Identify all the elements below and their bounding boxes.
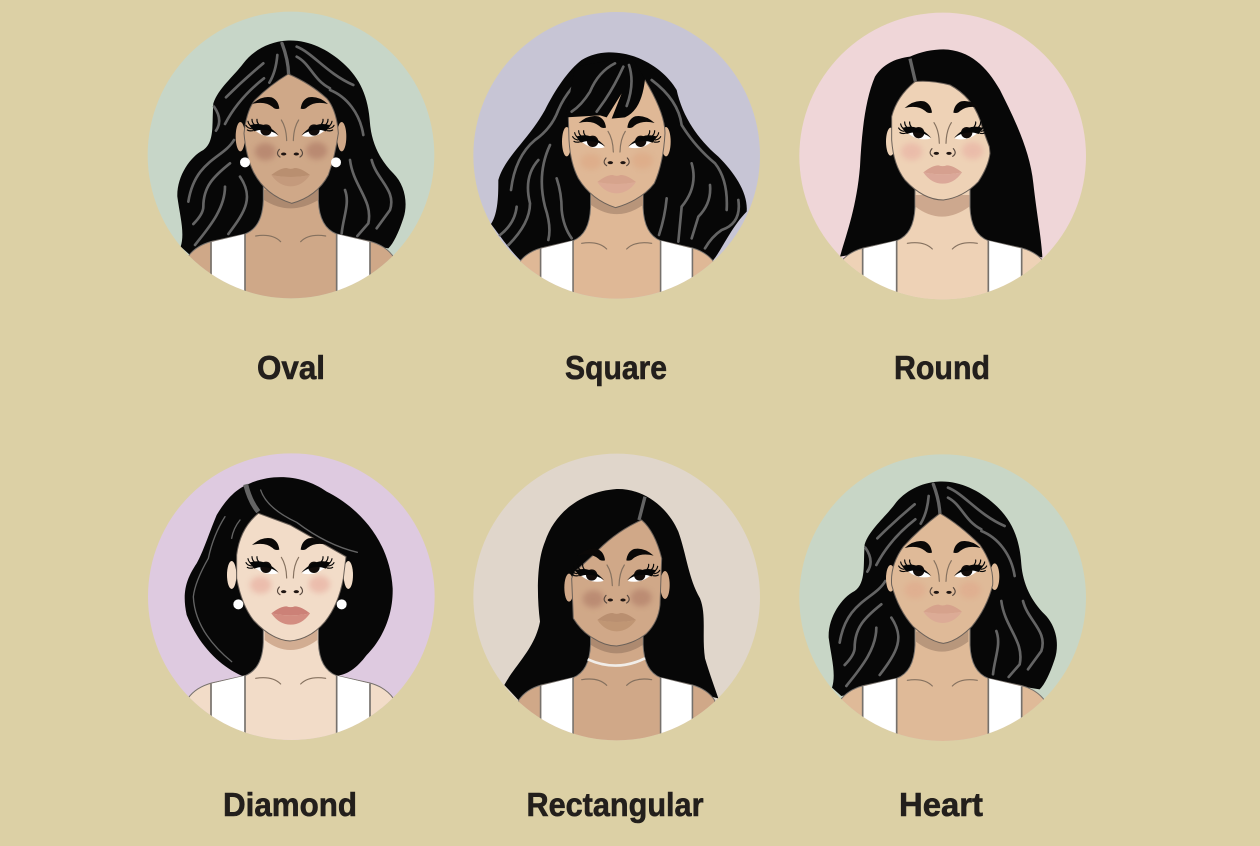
background circle: warm grey beige	[473, 454, 760, 740]
background circle: pale pink	[799, 13, 1086, 299]
background circle: sage green	[148, 12, 434, 298]
label: Square: Square	[565, 349, 667, 386]
label: Heart: Heart	[899, 786, 983, 823]
portrait: diamond face	[148, 453, 435, 740]
figure: square	[491, 52, 747, 298]
background circle: lilac	[148, 453, 435, 740]
figure: oval	[177, 40, 406, 298]
label: Diamond: Diamond	[223, 786, 357, 823]
background circle: lavender grey	[473, 12, 760, 299]
figure: diamond	[184, 477, 394, 740]
portrait: rectangular face	[473, 454, 760, 740]
portrait: round face	[799, 12, 1086, 300]
figure: rectangular	[504, 489, 718, 740]
label: Oval: Oval	[257, 349, 325, 386]
label: Round: Round	[894, 349, 990, 386]
portrait: oval face	[148, 12, 434, 298]
figure: heart	[828, 482, 1057, 741]
portrait: heart face	[799, 454, 1086, 741]
label: Rectangular: Rectangular	[526, 786, 704, 823]
background circle: sage green	[799, 454, 1086, 741]
portrait: square face	[473, 12, 760, 298]
figure: round	[840, 49, 1042, 300]
